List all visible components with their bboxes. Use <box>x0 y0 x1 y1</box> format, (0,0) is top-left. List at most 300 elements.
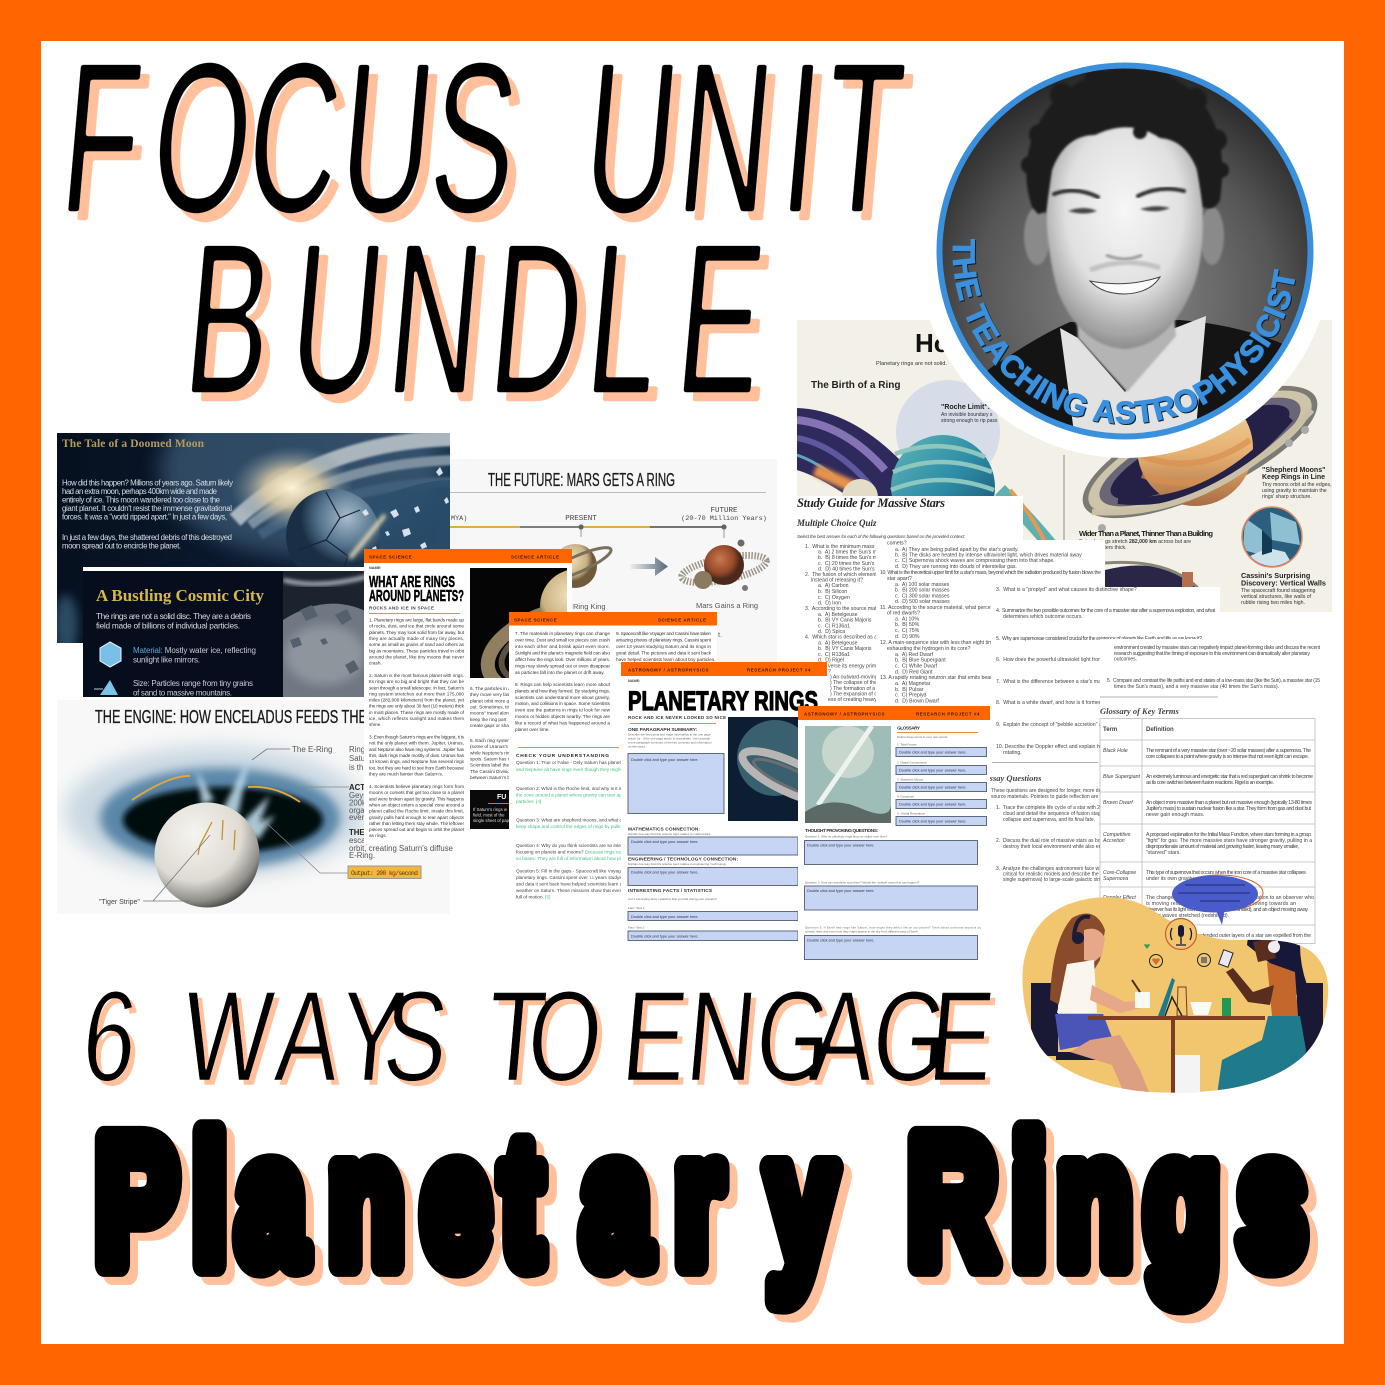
text: quiz questions column one: ) An outward-moving shc <box>830 674 887 680</box>
text: engine body: orga <box>349 806 365 815</box>
text: header labels <box>628 668 811 672</box>
text: quiz questions column one: a. A) Betelgeuse <box>818 640 858 646</box>
text: short answer questions <box>996 587 1216 756</box>
text: quiz questions column two: c. C) White Dwarf <box>895 664 938 670</box>
text: quiz questions column one: ? <box>828 669 831 675</box>
heading: planetary rings: Planetary Rings <box>95 1099 1306 1303</box>
answer box: fact one: Double click and type your answer here. <box>631 915 699 919</box>
text: article paragraphs seven and eight: planet over time. <box>515 727 550 732</box>
portrait <box>940 66 1310 440</box>
timeline: (20-70 Million Years) <box>681 515 767 523</box>
heading: thought provoking questions: THOUGHT PROVOKING QUESTIONS: <box>805 828 879 834</box>
table: glossary: "fight" for gas. The more massive stars have stronger gravity, pulling in a <box>1146 838 1312 844</box>
text: quiz questions column one: a. A) 2 times the Sun's mass <box>818 550 885 556</box>
heading: check your understanding: CHECK YOUR UNDERSTANDING <box>516 753 609 759</box>
blue ring <box>940 66 1310 436</box>
heading: what are rings around planets: AROUND PLANETS? <box>369 588 464 605</box>
table: glossary: Term <box>1103 727 1117 733</box>
text: header labels <box>369 554 560 560</box>
text: question three <box>805 926 981 934</box>
text: worksheet subtitle: ROCK AND ICE NEVER LOOKED SO NICE <box>628 715 726 720</box>
text: article paragraph nine: 9. Spacecraft like Voyager and Cassini have taken <box>616 631 711 636</box>
text: article paragraphs one to four: and Neptune also have ring systems. Jupiter has <box>369 747 465 752</box>
text: quiz questions column one: ) The collapse of the cor <box>830 680 886 686</box>
text: question three: Question 3: If Earth had rings like Saturn, how might they affect life on our planet? Think about potential impacts on <box>805 926 981 930</box>
text: article paragraphs seven and eight: 7. The materials in planetary rings can change <box>515 631 610 636</box>
table: glossary: Black Hole <box>1103 748 1128 754</box>
heading: study guide title: Study Guide for Massive Stars <box>797 496 945 510</box>
text: article paragraphs seven and eight: planets and how they formed. By studying rings, <box>515 688 610 693</box>
text: article column two: (some of Uranus's ri <box>470 744 512 749</box>
text: essay question four and five: environment created by massive stars can negatively impact planet-forming disks and discuss the recent <box>1114 645 1321 651</box>
panel: study guide glossary page <box>1100 639 1322 944</box>
text: article paragraphs one to four: when an object enters a special zone around a <box>369 802 464 808</box>
text: roche limit note: strong enough to rip pass <box>941 418 998 424</box>
heading: what are rings around planets <box>369 574 464 605</box>
text: quiz questions column two: comets? <box>887 540 907 546</box>
text: header labels: SPACE SCIENCE <box>369 554 412 560</box>
text: review questions: and Neptune all have rings even though they might b <box>516 767 626 772</box>
callout: tiger stripe: "Tiger Stripe" <box>99 899 140 906</box>
text: header labels: SCIENCE ARTICLE <box>658 618 707 622</box>
text: review questions: Question 5: Fill in the gaps - Spacecraft like Voyag <box>516 868 621 874</box>
text: quiz questions column one: a. A) Carbon <box>818 583 849 589</box>
scene figures <box>1031 912 1323 1096</box>
text: infographic subtitle: Planetary rings are not solid. <box>876 361 947 367</box>
text: article paragraphs seven and eight: over time. Dust and small ice pieces can crash <box>515 638 610 642</box>
table: glossary: observer has its light waves compressed (blueshifted), and an object moving away <box>1146 907 1308 913</box>
text: essay question four and five: times the Sun's mass), and a very massive star (40 times the Sun's mass). <box>1114 684 1279 690</box>
text: article paragraphs one to four: some as small as grains of sand and others as <box>369 642 465 647</box>
table: glossary: A proposed explanation for the Initial Mass Function, where stars forming in a group <box>1146 832 1311 838</box>
text: article paragraphs one to four: 1. Planetary rings are large, flat bands made up <box>369 618 464 622</box>
icon: ice crystal hexagon <box>100 642 121 667</box>
callout: fun fact box <box>470 790 510 829</box>
text: article column two: Scientists label thei <box>470 763 510 768</box>
text: article paragraphs seven and eight: affect how the rings look. Over millions of years, <box>515 657 610 662</box>
answer box: summary <box>628 754 724 814</box>
text: article paragraphs seven and eight: into each other and break apart even more. <box>515 644 610 649</box>
text: engine body: every <box>349 813 368 822</box>
divider <box>450 492 766 494</box>
text: engine body: escap <box>349 836 370 845</box>
text: article paragraphs seven and eight: 8. Rings can help scientists learn more about <box>515 682 611 687</box>
text: cosmic city intro: The rings are not a solid disc. They are a debris <box>96 611 251 621</box>
text: article paragraphs one to four: 13 known rings, and Neptune has several rings <box>369 759 465 764</box>
text: quiz questions column one: d. D) 40 times the Sun's mass <box>818 566 889 572</box>
text: quiz questions column one: a. A) Betelgeuse <box>818 612 858 618</box>
text: article paragraphs one to four: planet called the Roche limit. Inside this limit, <box>369 809 464 814</box>
timeline: FUTURE <box>710 507 738 515</box>
text: short answer questions: 9. Explain the concept of "pebble accretion" as a n <box>996 722 1113 728</box>
illustration: saturn and shattering moon <box>57 433 450 643</box>
text: review questions: particles. [4] <box>516 799 541 804</box>
text: article column two: keep the ring part <box>470 717 507 722</box>
text: essay prompts: 1. Trace the complete life cycle of a star with 25 tim <box>996 805 1111 811</box>
text: engine body: E-Ring. <box>349 851 375 860</box>
answer box: fact two <box>628 931 798 940</box>
text: article paragraphs one to four: as rings. <box>369 833 387 838</box>
text: article paragraphs one to four: miles (282,000 kilometers) from the planet, yet <box>369 698 465 703</box>
text: essay question four and five <box>1107 645 1321 690</box>
text: article column two: planet orbit more q <box>470 698 509 703</box>
text: engine body: Satu <box>349 754 365 763</box>
text: article paragraphs seven and eight: rings may slowly spread out or even disappear <box>515 664 610 668</box>
glossary answer fields: Double click and type your answer here. <box>899 750 967 754</box>
text: quiz questions column one: b. B) VY Canis Majoris <box>818 646 872 652</box>
text: engine body: THE I <box>349 828 369 837</box>
divider <box>369 612 460 614</box>
table: glossary: Blue Supergiant <box>1103 774 1140 780</box>
divider <box>518 746 619 748</box>
table: glossary: is moving relative to the source. An object moving towards an <box>1146 901 1296 907</box>
text: quiz questions column two: b. B) 50% <box>895 622 920 628</box>
text: quiz questions column two: b. B) 200 solar masses <box>895 588 950 594</box>
text: shepherd moons: "Shepherd Moons" <box>1262 467 1325 474</box>
text: quiz questions column two: d. D) They are running into clouds of interstellar gas. <box>895 564 1017 570</box>
text: summary instructions: on this topic). <box>628 744 646 748</box>
text: review questions: weather on Saturn. These missions show that even th <box>516 888 628 893</box>
text: header labels: ASTRONOMY / ASTROPHYSICS <box>804 712 885 716</box>
text: wider than a planet: Wider Than a Planet, Thinner Than a Building <box>1079 529 1213 538</box>
text: quiz questions column one: b. B) Silicon <box>818 589 847 595</box>
table: glossary <box>1100 718 1315 944</box>
text: quiz questions column two: 10. What is the theoretical upper limit for a star's mass, beyond which the radiation produced by fusion blows the <box>880 570 1101 576</box>
divider <box>630 722 716 724</box>
text: size <box>133 679 253 698</box>
heading: mathematics connection: MATHEMATICS CONNECTION: <box>628 826 701 832</box>
left woman <box>1050 914 1150 1095</box>
text: article column two: moons" travel along <box>470 711 512 716</box>
text: quiz questions column two: 12. A main-sequence star with less than eight times the <box>880 640 1007 646</box>
text: quiz questions column one: ) The expansion of outer <box>830 692 886 698</box>
text: engine body: ACTI <box>349 783 367 792</box>
text: essay prompts: 2. Discuss the dual role of massive stars as both d <box>996 838 1109 844</box>
text: article paragraphs one to four: ice, which reflects sunlight and makes them <box>369 716 464 721</box>
text: article column two: they move very fast. <box>470 692 512 697</box>
text: quiz questions column two: 11. According to the source material, what percentage o <box>880 605 1008 611</box>
timeline <box>450 507 767 538</box>
divider <box>1064 455 1065 540</box>
text: article paragraphs one to four: big as mountains. These particles travel in orbit <box>369 648 465 653</box>
table: glossary: The process where the extended outer layers of a star are expelled from the <box>1146 933 1311 939</box>
text: quiz questions column one: d. D) Spica <box>818 629 845 635</box>
text: article paragraphs one to four: crash. <box>369 661 382 666</box>
text: quiz questions column one <box>805 544 895 703</box>
text: quiz questions column two: of red dwarfs? <box>887 610 920 616</box>
icon: heart <box>1144 944 1162 968</box>
text: quiz questions column one: c. C) 20 times the Sun's mass <box>818 561 889 567</box>
table <box>1088 1016 1265 1096</box>
text: article paragraphs one to four: in most places. These rings are mostly made of <box>369 710 465 715</box>
text: wider than a planet <box>1079 530 1212 549</box>
table: glossary: Accretion <box>1102 838 1125 844</box>
text: short answer questions: rotating. <box>1003 750 1022 756</box>
heading: one paragraph summary: ONE PARAGRAPH SUMMARY: <box>628 727 698 733</box>
text: article paragraphs one to four: pieces spread out and begin to orbit the planet <box>369 827 465 832</box>
text: quiz questions column two: d. D) 500 solar masses <box>895 599 950 605</box>
table: glossary: The remnant of a very massive star (over ~20 solar masses) after a supernova. The <box>1146 748 1311 754</box>
text: short answer questions: 7. What is the difference between a star's mass an <box>996 679 1113 685</box>
illustration: striped planet with purple rings <box>797 408 1056 540</box>
text: roche limit note: "Roche Limit". <box>941 404 990 411</box>
text: quiz questions column one: b. B) VY Canis Majoris <box>818 618 872 624</box>
answer box: math: Double click and type your answer here. <box>631 840 699 844</box>
illustration: large saturn <box>1082 386 1318 532</box>
panel: study guide page 2 <box>876 540 1105 710</box>
text: article paragraphs seven and eight: moons or hidden objects nearby. The rings are <box>515 714 610 719</box>
text: cassini's discovery: vertical structures, like walls of <box>1241 594 1312 600</box>
answer box: summary: Double click and type your answer here. <box>631 758 699 762</box>
text: engine body: Geys <box>349 791 367 800</box>
text: quiz questions column two: a. A) They are being pulled apart by the star's gravity. <box>895 547 1019 553</box>
callout: fun fact box: field, most of the <box>473 812 505 818</box>
callout: fun fact box: If Saturn's rings w <box>473 807 508 812</box>
heading: interesting facts: INTERESTING FACTS / STATISTICS <box>628 888 713 894</box>
text: shepherd moons: using gravity to maintain the <box>1262 488 1327 494</box>
text: engine body: 200k <box>349 798 366 808</box>
image: saturn rings photo <box>470 568 567 678</box>
text: article column two: The Cassini Division <box>470 769 513 774</box>
text: article paragraphs seven and eight: Sunlight and the planet's magnetic field can also <box>515 650 610 656</box>
callout: the e-ring <box>252 745 332 760</box>
divider <box>1100 696 1218 698</box>
text: short answer questions: 3. What is a "proplyd" and what causes its distinctive shape? <box>996 587 1137 593</box>
text: fact two label: Fact / Stat 2: <box>628 926 645 930</box>
text: roche limit note <box>941 404 998 424</box>
answer box: question one: Double click and type your answer here. <box>807 844 875 848</box>
text: quiz questions column one: instead of releasing it? <box>811 578 863 584</box>
text: doomed moon body: entirely of ice. This moon wandered too close to the <box>62 496 220 504</box>
image: ringed planet over landscape <box>805 726 891 823</box>
text: article column two: 6. Each ring system <box>470 738 511 743</box>
callout: fun fact box: FU <box>497 794 506 801</box>
text: header labels: RESEARCH PROJECT #4 <box>916 712 980 716</box>
answer box: question three <box>804 936 978 960</box>
text: quiz questions column one: d. D) Rigel <box>818 658 844 664</box>
text: article paragraph nine: have helped scientists learn about tiny particles, <box>616 657 716 662</box>
icon: ringed saturn <box>542 542 614 588</box>
text: quiz questions column two: d. D) Red Giant <box>895 670 933 676</box>
text: article paragraph nine <box>616 631 716 662</box>
text: fact one label: Fact / Stat 1: <box>628 906 645 910</box>
text: article paragraphs one to four: moons or comets that get too close to a planet <box>369 790 465 795</box>
text: size: of sand to massive mountains. <box>133 688 232 698</box>
panel: study guide page 1 <box>796 496 1023 716</box>
text: header labels <box>514 618 707 622</box>
table: glossary: Supernova <box>1103 876 1128 882</box>
label: ring king: Ring King <box>573 602 606 611</box>
text: review questions: planetary rings. Cassini spent over 11 years studying S <box>516 875 630 880</box>
text: roche limit note: An invisible boundary s <box>941 412 993 418</box>
table: glossary: core collapses to a point where gravity is so intense that not even light can escape. <box>1146 754 1309 760</box>
timeline: PRESENT <box>565 515 597 523</box>
text: article column two: out. Sometimes, tiny <box>470 704 513 710</box>
text: quiz questions column one: ) The formation of a bac <box>830 686 885 692</box>
text: essay question four and five: 5. Compare and contrast the life paths and end states of a low-mass star (like the Sun), a massive star (15 <box>1107 678 1320 684</box>
text: doomed moon body: moon spread out to encircle the planet. <box>62 542 181 550</box>
text: review questions: Question 1: True or False - Only Saturn has planetary <box>516 760 628 765</box>
text: wider than a planet: only 10 meters thick. <box>1079 545 1127 551</box>
speech bubble <box>1172 875 1263 925</box>
text: article paragraphs one to four: 2. Saturn is the most famous planet with rings. <box>369 673 464 678</box>
text: summary instructions: Describe the key points and major information in the one page <box>628 732 711 736</box>
arrow <box>630 557 668 576</box>
text: quiz questions column two: 13. A rapidly rotating neutron star that emits beams of X <box>880 675 1008 681</box>
text: engine body: is th <box>349 763 363 772</box>
text: essay prompts: collapse and supernova, and its final fate. <box>1003 817 1095 823</box>
answer box: math <box>628 837 798 855</box>
text: glossary instructions: Define these terms in your own words: <box>897 735 948 739</box>
text: engineering instructions: Explain one way that this science topic relates to engineering / technology <box>628 862 727 866</box>
text: wider than a planet: Saturn's rings stretch 282,000 km across but are <box>1079 539 1191 545</box>
text: math instructions: Explain one way that this science topic relates to mathematics <box>628 832 711 836</box>
text: article paragraphs one to four: 3. Even though Saturn's rings are the biggest, it is <box>369 734 465 740</box>
text: article column two: spots. Saturn has m <box>470 756 512 762</box>
heading: glossary: GLOSSARY <box>897 726 921 732</box>
text: quiz questions column two: c. C) Supernova shock waves are compressing them into that shape. <box>895 558 1055 564</box>
icon: microphone <box>1166 918 1196 950</box>
cup, tablet, vase, bowl and can <box>1132 978 1231 1016</box>
text: article paragraphs one to four: ring system stretches out more than 175,000 <box>369 691 464 696</box>
text: quiz questions column two: b. B) Pulsar <box>895 687 924 693</box>
text: review questions: and data it sent back have helped scientists learn ab <box>516 882 625 886</box>
text: article paragraphs one to four: not the only planet with them. Jupiter, Uranus, <box>369 741 464 746</box>
text: article paragraphs seven and eight: like a record of what has happened around a <box>515 720 610 725</box>
text: article paragraphs one to four: thin, dark rings made mostly of dust. Uranus has <box>369 753 465 758</box>
heading: multiple choice quiz: Multiple Choice Quiz <box>796 518 877 528</box>
glossary answer fields: 4. Gossamer <box>897 794 914 798</box>
text: header labels: SPACE SCIENCE <box>514 618 557 622</box>
panel: the engine enceladus <box>57 700 453 914</box>
text: article paragraphs seven and eight: as particles fall into the planet or drift away. <box>515 670 605 675</box>
table: glossary: Core-Collapse <box>1103 870 1136 876</box>
callout: output box <box>348 866 421 878</box>
text: article paragraphs one to four: they are much fainter than Saturn's. <box>369 771 443 776</box>
text: article paragraphs seven and eight <box>515 631 611 732</box>
heading: mars panel title: THE FUTURE: MARS GETS A RING <box>488 470 675 490</box>
glossary answer fields: Double click and type your answer here. <box>899 786 967 790</box>
glossary answer fields: 5. Orbital Resonance <box>897 812 926 816</box>
heading: the birth of a ring: The Birth of a Ring <box>811 380 900 391</box>
table: glossary: This type of supernova that occurs when the iron core of a massive star collapses <box>1146 870 1306 876</box>
text: size: Size: Particles range from tiny grains <box>133 679 253 688</box>
text: short answer questions: 5. Why are supernovae considered crucial for the existence of planets like Earth and life as we know it? <box>996 636 1202 642</box>
table: glossary: as its core switches between fusion reactions. Rigel is an example. <box>1146 780 1274 786</box>
circular brand text: THE TEACHING ASTROPHYSICIST <box>952 239 1296 425</box>
text: essay question four and five: outcomes. <box>1114 656 1137 662</box>
heading: glossary of key terms: Glossary of Key Terms <box>1100 706 1179 716</box>
text: doomed moon body: giant planet. It couldn't resist the immense gravitational <box>62 504 232 513</box>
text: subheading: ROCKS AND ICE IN SPACE <box>369 606 434 610</box>
panel: the future mars gets a ring <box>450 459 777 665</box>
text: shepherd moons: Tiny moons orbit at the edges, <box>1262 482 1332 488</box>
callout: tiger stripe <box>99 835 210 906</box>
answer box: question three: Double click and type your answer here. <box>807 938 875 942</box>
text: quiz questions column two: c. C) 75% <box>895 628 920 634</box>
text: doomed moon body: In just a few days, the shattered debris of this destroyed <box>62 533 232 542</box>
text: quiz questions column one: 2. The fusion of which element main <box>805 572 890 578</box>
heading: infographic title fragment: Ho <box>915 328 950 358</box>
text: short answer questions: determines which outcome occurs. <box>1003 614 1083 620</box>
icon: thumbs up <box>1198 954 1210 966</box>
table: glossary: Brown Dwarf <box>1103 800 1133 806</box>
text: quiz instructions: Select the best answer for each of the following questions based on the provided context: <box>797 534 966 539</box>
text: article paragraphs seven and eight: even use the patterns in rings to look for new <box>515 708 611 713</box>
heading: cosmic city title: A Bustling Cosmic City <box>96 586 264 605</box>
text: short answer questions: 8. What is a white dwarf, and how is it formed? <box>996 700 1105 706</box>
text: essay question four and five: research suggesting that the timing of exposure to this environment can dramatically alter planetary <box>1114 651 1310 657</box>
text: article paragraphs one to four: and were broken apart by gravity. This happens <box>369 796 465 801</box>
text: quiz questions column one: 1. What is the minimum mass a star <box>805 544 889 550</box>
label: mars gains a ring: Mars Gains a Ring <box>696 601 758 610</box>
table: glossary: has its waves stretched (redshifted). <box>1146 913 1229 919</box>
text: name label: NAME: <box>628 679 640 683</box>
text: essay prompts: source materials. Pointers to guide reflection are provid <box>991 794 1114 800</box>
glossary answer fields: 2. Digital Components <box>897 760 927 764</box>
text: article paragraphs one to four: rather than letting them stay whole. The leftover <box>369 821 464 826</box>
icon: pale moon disc <box>896 380 1000 464</box>
glossary answer fields: Double click and type your answer here. <box>899 802 967 806</box>
divider <box>992 762 1098 764</box>
panel: research project worksheet page 2 <box>798 706 990 966</box>
text: quiz questions column one: c. C) R136a1 <box>818 652 850 658</box>
text: short answer questions: 10. Describe the Doppler effect and explain how ast <box>996 744 1115 750</box>
table: glossary: disproportionate amount of material and growing faster, leaving many smaller, <box>1146 844 1299 850</box>
text: article paragraphs one to four: shine. <box>369 722 382 727</box>
text: review questions: full of motion. [5] <box>516 894 550 900</box>
text: quiz questions column two: c. C) 300 solar masses <box>895 594 950 600</box>
text: article column two: while Neptune's ring <box>470 750 512 755</box>
panel: study guide page 3 short answers and essays <box>983 587 1220 907</box>
text: question one: Question 1: Why do planetary rings become visible over time? <box>805 834 888 838</box>
callout: the e-ring: The E-Ring <box>292 745 332 754</box>
text: quiz questions column one: ess of creating heavy ele <box>828 697 885 703</box>
answer box: question two: Double click and type your answer here. <box>807 889 875 893</box>
text: facts instructions: List 2 interesting facts / statistics that you find during your research <box>628 897 717 901</box>
text: article paragraph nine: amazing photos of planetary rings. Cassini spent <box>616 638 712 642</box>
heading: engineering connection: ENGINEERING / TECHNOLOGY CONNECTION: <box>628 856 739 862</box>
text: article paragraph nine: great detail. The pictures and data it sent back <box>616 650 712 656</box>
divider <box>897 732 978 734</box>
text: header labels: SCIENCE ARTICLE <box>511 554 560 560</box>
text: quiz questions column two: star apart? <box>887 576 912 582</box>
table: glossary: An extremely luminous and energetic star that a red supergiant can shrink to become <box>1146 774 1313 780</box>
text: quiz questions column two: a. A) 100 solar masses <box>895 582 950 588</box>
text: essay prompts: single supernova) to large-scale galactic simula <box>1003 877 1108 883</box>
callout: fun fact box: single sheet of pap <box>473 818 510 823</box>
profile photo badge <box>930 62 1320 458</box>
text: engine body <box>349 745 453 860</box>
text: article paragraphs one to four: gravity pulls hard enough to tear apart objects <box>369 815 465 820</box>
text: review questions: keep shape and control the edges of rings by pulling o <box>516 824 629 829</box>
panel: space science article page 2 <box>509 612 717 904</box>
text: quiz questions column one: 3. According to the source material, <box>805 606 888 612</box>
answer box: question two <box>804 886 978 910</box>
table: glossary: The change in wavelength of light or sound in relation to an observer who <box>1146 895 1314 901</box>
glossary answer fields: 1. Tidal Forces <box>897 742 917 746</box>
shopping bag <box>1175 1055 1200 1093</box>
illustration: ring edge with building <box>1105 560 1199 587</box>
text: material: sunlight like mirrors. <box>133 656 200 664</box>
text: article column two: create gaps or sharp <box>470 723 513 728</box>
heading: what are rings around planets: WHAT ARE RINGS <box>369 574 455 591</box>
text: review questions <box>516 760 630 900</box>
heading: focus unit: FOCUS UNIT <box>53 18 912 258</box>
text: essay prompts: cloud and detail the sequence of fusion stages i <box>1003 811 1108 817</box>
glossary answer fields: Double click and type your answer here. <box>899 768 967 772</box>
callout line to output <box>258 787 349 873</box>
